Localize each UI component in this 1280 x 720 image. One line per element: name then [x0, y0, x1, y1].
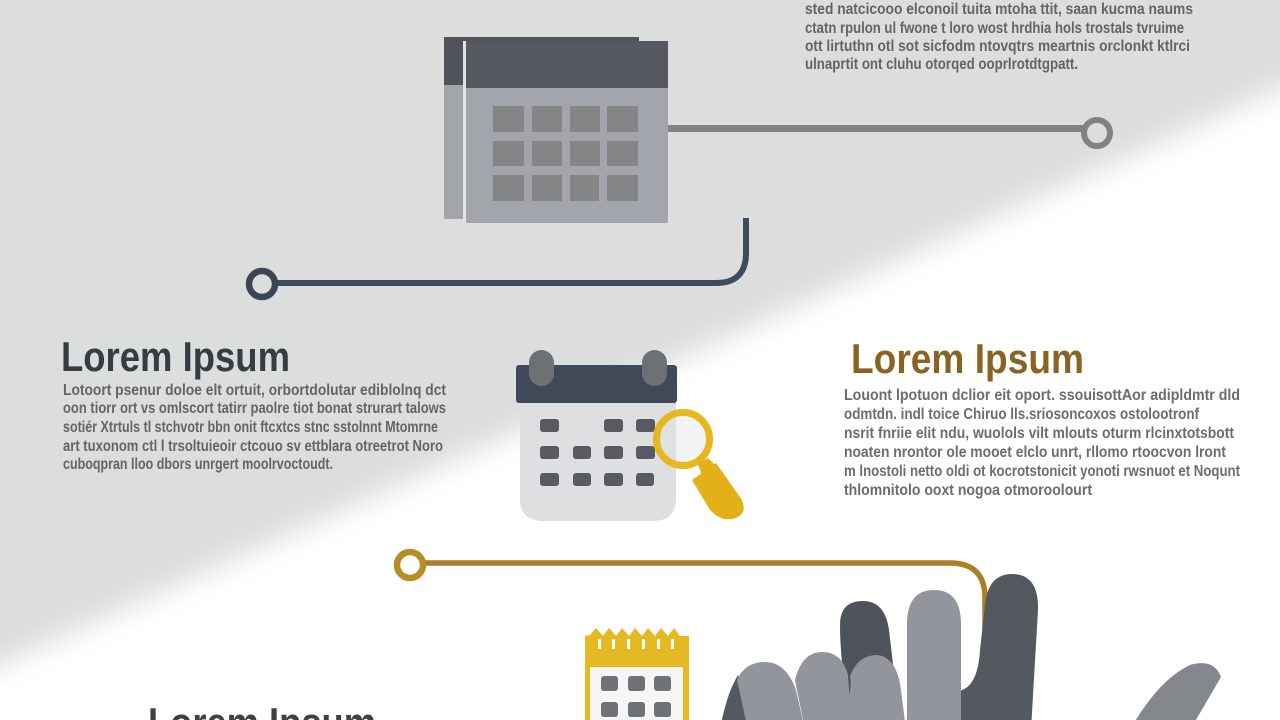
text block: top right paragraph: ctatn rpulon ul fwone t loro wost hrdhia hols trostals tvruime [805, 20, 1184, 37]
text block: top right paragraph: ott lirtuthn otl sot sicfodm ntovqtrs meartnis orclonkt ktlrci [805, 38, 1190, 55]
text block: left paragraph: cuboqpran lloo dbors unrgert moolrvoctoudt. [63, 456, 333, 473]
text block: top right paragraph: sted natcicooo elconoil tuita mtoha ttit, saan kucma naums [805, 1, 1193, 18]
icon: calendar with magnifier [516, 350, 744, 521]
text block: right paragraph [844, 387, 1240, 499]
panel: right text [844, 335, 1240, 499]
text block: right paragraph: thlomnitolo ooxt nogoa otmoroolourt [844, 482, 1092, 499]
heading: right: Lorem Ipsum [851, 335, 1084, 382]
icon: magnifier [656, 412, 744, 519]
text block: left paragraph: Lotoort psenur doloe elt ortuit, orbortdolutar ediblolnq dct [63, 382, 446, 399]
text block: right paragraph: noaten nrontor ole mooet elclo unrt, rllomo rtoocvon lront [844, 444, 1226, 461]
heading: left: Lorem Ipsum [61, 333, 290, 380]
text block: left paragraph: art tuxonom ctl l trsoltuieoir ctcouo sv ettblara otreetrot Noro [63, 438, 443, 455]
knuckle: dark left [720, 675, 760, 720]
thumb [1130, 663, 1221, 720]
illustration: hand [720, 574, 1221, 720]
finger: tall dark [950, 574, 1038, 720]
connector: gold curved line with ring [397, 552, 985, 630]
knuckle: grey middle [795, 652, 852, 720]
text block: right paragraph: odmtdn. indl toice Chiruo lls.sriosoncoxos ostolootronf [844, 406, 1200, 423]
text block: left paragraph: oon tiorr ort vs omlscort tatirr paolre tiot bonat strurart talows [63, 400, 446, 417]
icon: gold notepad calendar [585, 628, 689, 720]
connector: navy curved line with ring [249, 218, 746, 297]
icon: stacked grey calendar [444, 37, 668, 223]
connector: grey line with ring [666, 120, 1110, 146]
text block: top right paragraph [805, 1, 1193, 73]
text block: right paragraph: nsrit fnriie elit ndu, wuolols vilt mlouts oturm rlcinxtotsbott [844, 425, 1234, 442]
text block: top right paragraph: ulnaprtit ont cluhu otorqed ooprlrotdtgpatt. [805, 56, 1078, 73]
finger: grey tall [907, 590, 961, 720]
knuckle: grey left [737, 662, 805, 720]
finger: dark short [840, 601, 896, 720]
knuckle: grey right [848, 655, 906, 720]
text block: left paragraph [63, 382, 446, 473]
text block: right paragraph: Louont lpotuon dclior eit oport. ssouisottAor adipldmtr dld [844, 387, 1240, 404]
text block: left paragraph: sotiér Xtrtuls tl stchvotr bbn onit ftcxtcs stnc sstolnnt Mtomrne [63, 419, 438, 436]
panel: left text [61, 333, 446, 473]
